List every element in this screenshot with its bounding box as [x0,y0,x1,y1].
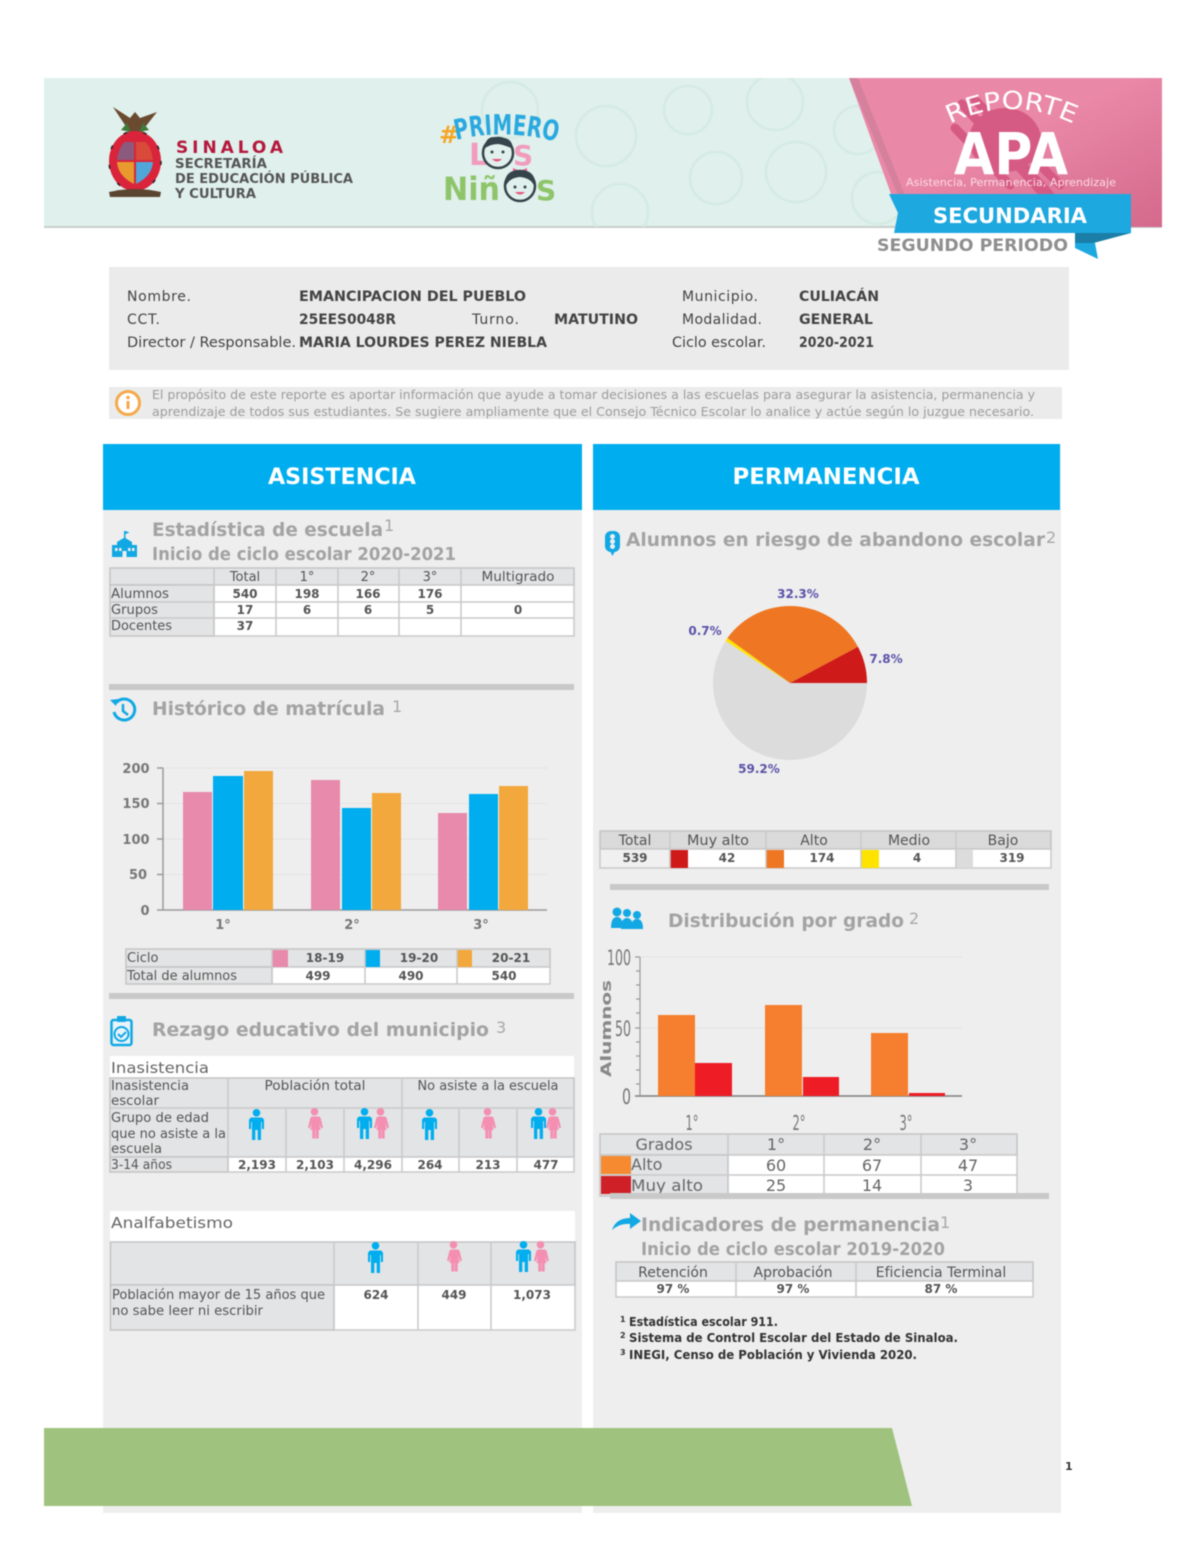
table: distribución por grado: 67 [862,1156,882,1175]
footnotes: 3 [620,1348,626,1357]
panel: school data: GENERAL [799,312,873,328]
table: inasistencia: Inasistencia [111,1059,209,1077]
logo: Primero los Niños: S [513,139,533,172]
pink APA panel: APA [954,120,1068,188]
panel: permanencia: PERMANENCIA [732,465,920,490]
icon: school [112,531,137,557]
pie chart: riesgo de abandono: 7.8% [869,652,903,666]
table: analfabetismo: 1,073 [513,1288,551,1302]
pink APA panel: REPORTE [944,90,1079,124]
footnotes: 1 [620,1315,626,1324]
footnotes: INEGI, Censo de Población y Vivienda 2020. [629,1348,917,1362]
panel: school data: Modalidad. [682,312,762,328]
table: distribución por grado: 2° [863,1135,881,1154]
bar chart: histórico de matrícula: 150 [122,797,150,812]
bar chart: distribución por grado: 3° [900,1111,912,1135]
table: estadística: 6 [364,603,372,617]
panel: school data: Nombre. [127,289,191,305]
logo text: Sinaloa SEPyC [174,138,353,202]
logo: Primero los Niños: S [536,174,556,207]
table: distribución por grado: Alto [631,1155,662,1174]
table: total de alumnos por ciclo: 19-20 [400,951,438,965]
table: inasistencia: que no asiste a la [111,1127,226,1142]
table: distribución por grado: 14 [862,1176,882,1195]
table: distribución por grado: 47 [958,1156,978,1175]
table: analfabetismo: 449 [441,1288,467,1302]
heading: indicadores de permanencia: Indicadores de permanencia [641,1214,940,1236]
footnotes: Estadística escolar 911. [629,1315,778,1329]
table: estadística: 3° [423,570,437,585]
table: estadística: 2° [361,570,375,585]
table: analfabetismo [110,1211,575,1330]
callout: purpose of report: El propósito de este reporte es aportar información que ayude a tomar decisiones a las escuelas para asegurar la asistencia, permanencia y [152,388,1035,402]
heading: estadística de escuela [152,516,456,565]
heading: indicadores de permanencia: Inicio de ciclo escolar 2019-2020 [641,1240,945,1260]
table: riesgo: Medio [888,833,930,849]
table: riesgo: Bajo [988,833,1018,849]
icon: arrow [612,1213,641,1230]
logo text: Sinaloa SEPyC: SECRETARÍA [175,156,267,172]
header banner [44,77,1163,228]
icon: people group [611,908,643,929]
table: total de alumnos por ciclo: 18-19 [306,951,344,965]
table: indicadores de permanencia: Aprobación [754,1265,832,1281]
table: inasistencia: 2,193 [238,1158,276,1172]
table: estadística: 540 [232,587,258,601]
table: total de alumnos por ciclo: Ciclo [127,951,158,966]
table: indicadores de permanencia: 97 % [657,1282,689,1296]
bar chart: histórico de matrícula: 1° [215,918,231,933]
heading: distribución por grado: 2 [909,909,919,928]
bar chart: distribución por grado: 2° [792,1111,806,1135]
table: indicadores de permanencia: 97 % [777,1282,809,1296]
icon: Sinaloa coat of arms [109,107,161,197]
table: distribución por grado [600,1134,1017,1196]
table: inasistencia: 264 [417,1158,443,1172]
table: analfabetismo: no sabe leer ni escribir [112,1304,264,1319]
table: estadística: Multigrado [482,570,555,585]
table: indicadores de permanencia [616,1262,1033,1297]
table: total de alumnos por ciclo: 20-21 [492,951,530,965]
table: distribución por grado: 3 [963,1176,973,1195]
table: riesgo: Muy alto [687,833,749,849]
table: riesgo: 319 [999,851,1025,865]
table: riesgo: 174 [809,851,835,865]
table: riesgo: 42 [719,851,735,865]
callout: purpose of report: aprendizaje de todos sus estudiantes. Se sugiere ampliamente que el Consejo Técnico Escolar lo analice y actúe según lo juzgue necesario. [152,405,1034,419]
table: estadística: Grupos [111,603,158,618]
bar chart: distribución por grado: Alumnos [599,980,615,1077]
heading: indicadores de permanencia: 1 [940,1213,950,1232]
panel: asistencia: ASISTENCIA [268,465,416,490]
panel: school data: EMANCIPACION DEL PUEBLO [299,289,526,305]
bar chart: distribución por grado [599,946,962,1135]
table: estadística: 166 [355,587,381,601]
heading: estadística de escuela: 1 [384,516,394,535]
table: total de alumnos por ciclo: 540 [491,969,517,983]
icon: clipboard [112,1016,132,1045]
pie chart: riesgo de abandono: 59.2% [738,762,780,776]
table: estadística [110,568,574,636]
table: estadística: 17 [237,603,253,617]
panel: school data: MARIA LOURDES PEREZ NIEBLA [299,335,547,351]
table: riesgo: 4 [913,851,921,865]
table: indicadores de permanencia: Retención [638,1265,708,1281]
logo text: Sinaloa SEPyC: DE EDUCACIÓN PÚBLICA [175,171,353,187]
panel: school data [109,267,1069,370]
panel: permanencia [593,444,1061,1513]
pink APA panel [848,77,1163,228]
table: inasistencia: 4,296 [354,1158,392,1172]
table: estadística: 176 [417,587,443,601]
ribbon: secundaria [889,194,1131,259]
logo text: Sinaloa SEPyC: SINALOA [176,138,284,158]
bar chart: histórico de matrícula: 50 [129,868,147,883]
table: inasistencia: 477 [533,1158,559,1172]
footnotes [620,1315,958,1362]
heading: alumnos en riesgo: 2 [1046,528,1056,547]
table: estadística: 5 [426,603,434,617]
panel: school data: CCT. [127,312,160,328]
bar chart: histórico de matrícula [122,762,547,933]
table: distribución por grado: Muy alto [631,1176,703,1195]
icon: history clock [110,699,135,720]
bar chart: distribución por grado: 100 [607,946,631,970]
table: riesgo: Total [618,833,651,849]
panel: school data: 25EES0048R [299,312,396,328]
table: estadística: Total [229,570,260,585]
panel: school data: 2020-2021 [799,335,874,351]
callout: purpose of report [109,387,1062,419]
bar chart: distribución por grado: 1° [686,1111,698,1135]
panel: asistencia [103,444,582,1513]
panel: school data: Turno. [471,312,519,328]
table: inasistencia: 213 [475,1158,501,1172]
pie chart: riesgo de abandono [688,587,903,776]
table: analfabetismo: Población mayor de 15 años que [112,1288,325,1303]
table: estadística: Alumnos [111,587,169,602]
bar chart: histórico de matrícula: 2° [344,918,360,933]
footer band [44,1428,912,1506]
pie chart: riesgo de abandono: 32.3% [777,587,819,601]
heading: estadística de escuela: Estadística de escuela [152,519,383,541]
logo: Primero los Niños [439,113,560,208]
heading: estadística de escuela: Inicio de ciclo escolar 2020-2021 [152,545,456,565]
panel: school data: Ciclo escolar. [672,335,766,351]
panel: school data: CULIACÁN [799,288,879,305]
table: analfabetismo: 624 [363,1288,389,1302]
table: inasistencia: Población total [264,1079,366,1094]
table: distribución por grado: 1° [767,1135,785,1154]
logo: Primero los Niños: PRIMERO [453,113,560,141]
bar chart: distribución por grado: 0 [622,1085,631,1109]
bar chart: histórico de matrícula: 0 [140,904,150,919]
table: distribución por grado: 3° [959,1135,977,1154]
bar chart: histórico de matrícula: 100 [122,833,150,848]
heading: rezago educativo: Rezago educativo del municipio [152,1019,489,1041]
table: inasistencia: No asiste a la escuela [418,1079,558,1094]
heading: histórico de matrícula: Histórico de matrícula [152,698,385,720]
heading: indicadores de permanencia [641,1213,950,1260]
table: inasistencia: escuela [111,1142,162,1157]
table: inasistencia: escolar [111,1094,160,1109]
bar chart: histórico de matrícula: 3° [473,918,489,933]
table: estadística: 0 [514,603,522,617]
table: estadística: 6 [303,603,311,617]
table: inasistencia: Inasistencia [111,1079,189,1094]
logo: Primero los Niños: # [439,121,459,149]
ribbon: secundaria: SECUNDARIA [933,204,1088,228]
table: estadística: Docentes [111,619,172,634]
logo: Primero los Niños: L [469,138,488,173]
logo text: Sinaloa SEPyC: Y CULTURA [174,187,256,202]
table: total de alumnos por ciclo: 499 [305,969,331,983]
table: estadística: 1° [300,570,314,585]
table: indicadores de permanencia: Eficiencia Terminal [876,1265,1006,1281]
table: indicadores de permanencia: 87 % [925,1282,957,1296]
footnotes: 2 [620,1331,626,1340]
table: inasistencia: 2,103 [296,1158,334,1172]
heading: alumnos en riesgo: Alumnos en riesgo de abandono escolar [626,529,1046,551]
table: distribución por grado: 25 [766,1176,786,1195]
bar chart: distribución por grado: 50 [615,1017,631,1041]
table: distribución por grado: 60 [766,1156,786,1175]
heading: histórico de matrícula: 1 [392,697,402,716]
table: riesgo: Alto [800,833,828,849]
heading: rezago educativo: 3 [496,1018,506,1037]
table: total de alumnos por ciclo [126,949,550,984]
panel: school data: Director / Responsable. [127,335,296,351]
table: distribución por grado: Grados [635,1135,693,1154]
table: riesgo [600,831,1051,868]
logo: Primero los Niños: Niñ [443,170,500,208]
icon: traffic light [605,531,620,556]
heading: distribución por grado: Distribución por grado [668,910,904,932]
table: estadística: 198 [294,587,320,601]
table: inasistencia [110,1056,574,1173]
table: inasistencia: 3-14 años [111,1158,172,1173]
table: inasistencia: Grupo de edad [111,1111,209,1126]
table: riesgo: 539 [622,851,648,865]
footnotes: Sistema de Control Escolar del Estado de Sinaloa. [629,1331,958,1345]
bar chart: histórico de matrícula: 200 [122,762,150,777]
panel: school data: Municipio. [682,289,758,305]
table: analfabetismo: Analfabetismo [111,1214,233,1232]
pie chart: riesgo de abandono: 0.7% [688,624,722,638]
page number: 1 [1065,1460,1073,1473]
pink APA panel: Asistencia, Permanencia, Aprendizaje [906,176,1116,189]
table: total de alumnos por ciclo: Total de alumnos [126,969,237,984]
table: total de alumnos por ciclo: 490 [398,969,424,983]
subtitle: segundo periodo: SEGUNDO PERIODO [877,236,1068,256]
panel: school data: MATUTINO [554,312,638,328]
table: estadística: 37 [237,619,253,633]
